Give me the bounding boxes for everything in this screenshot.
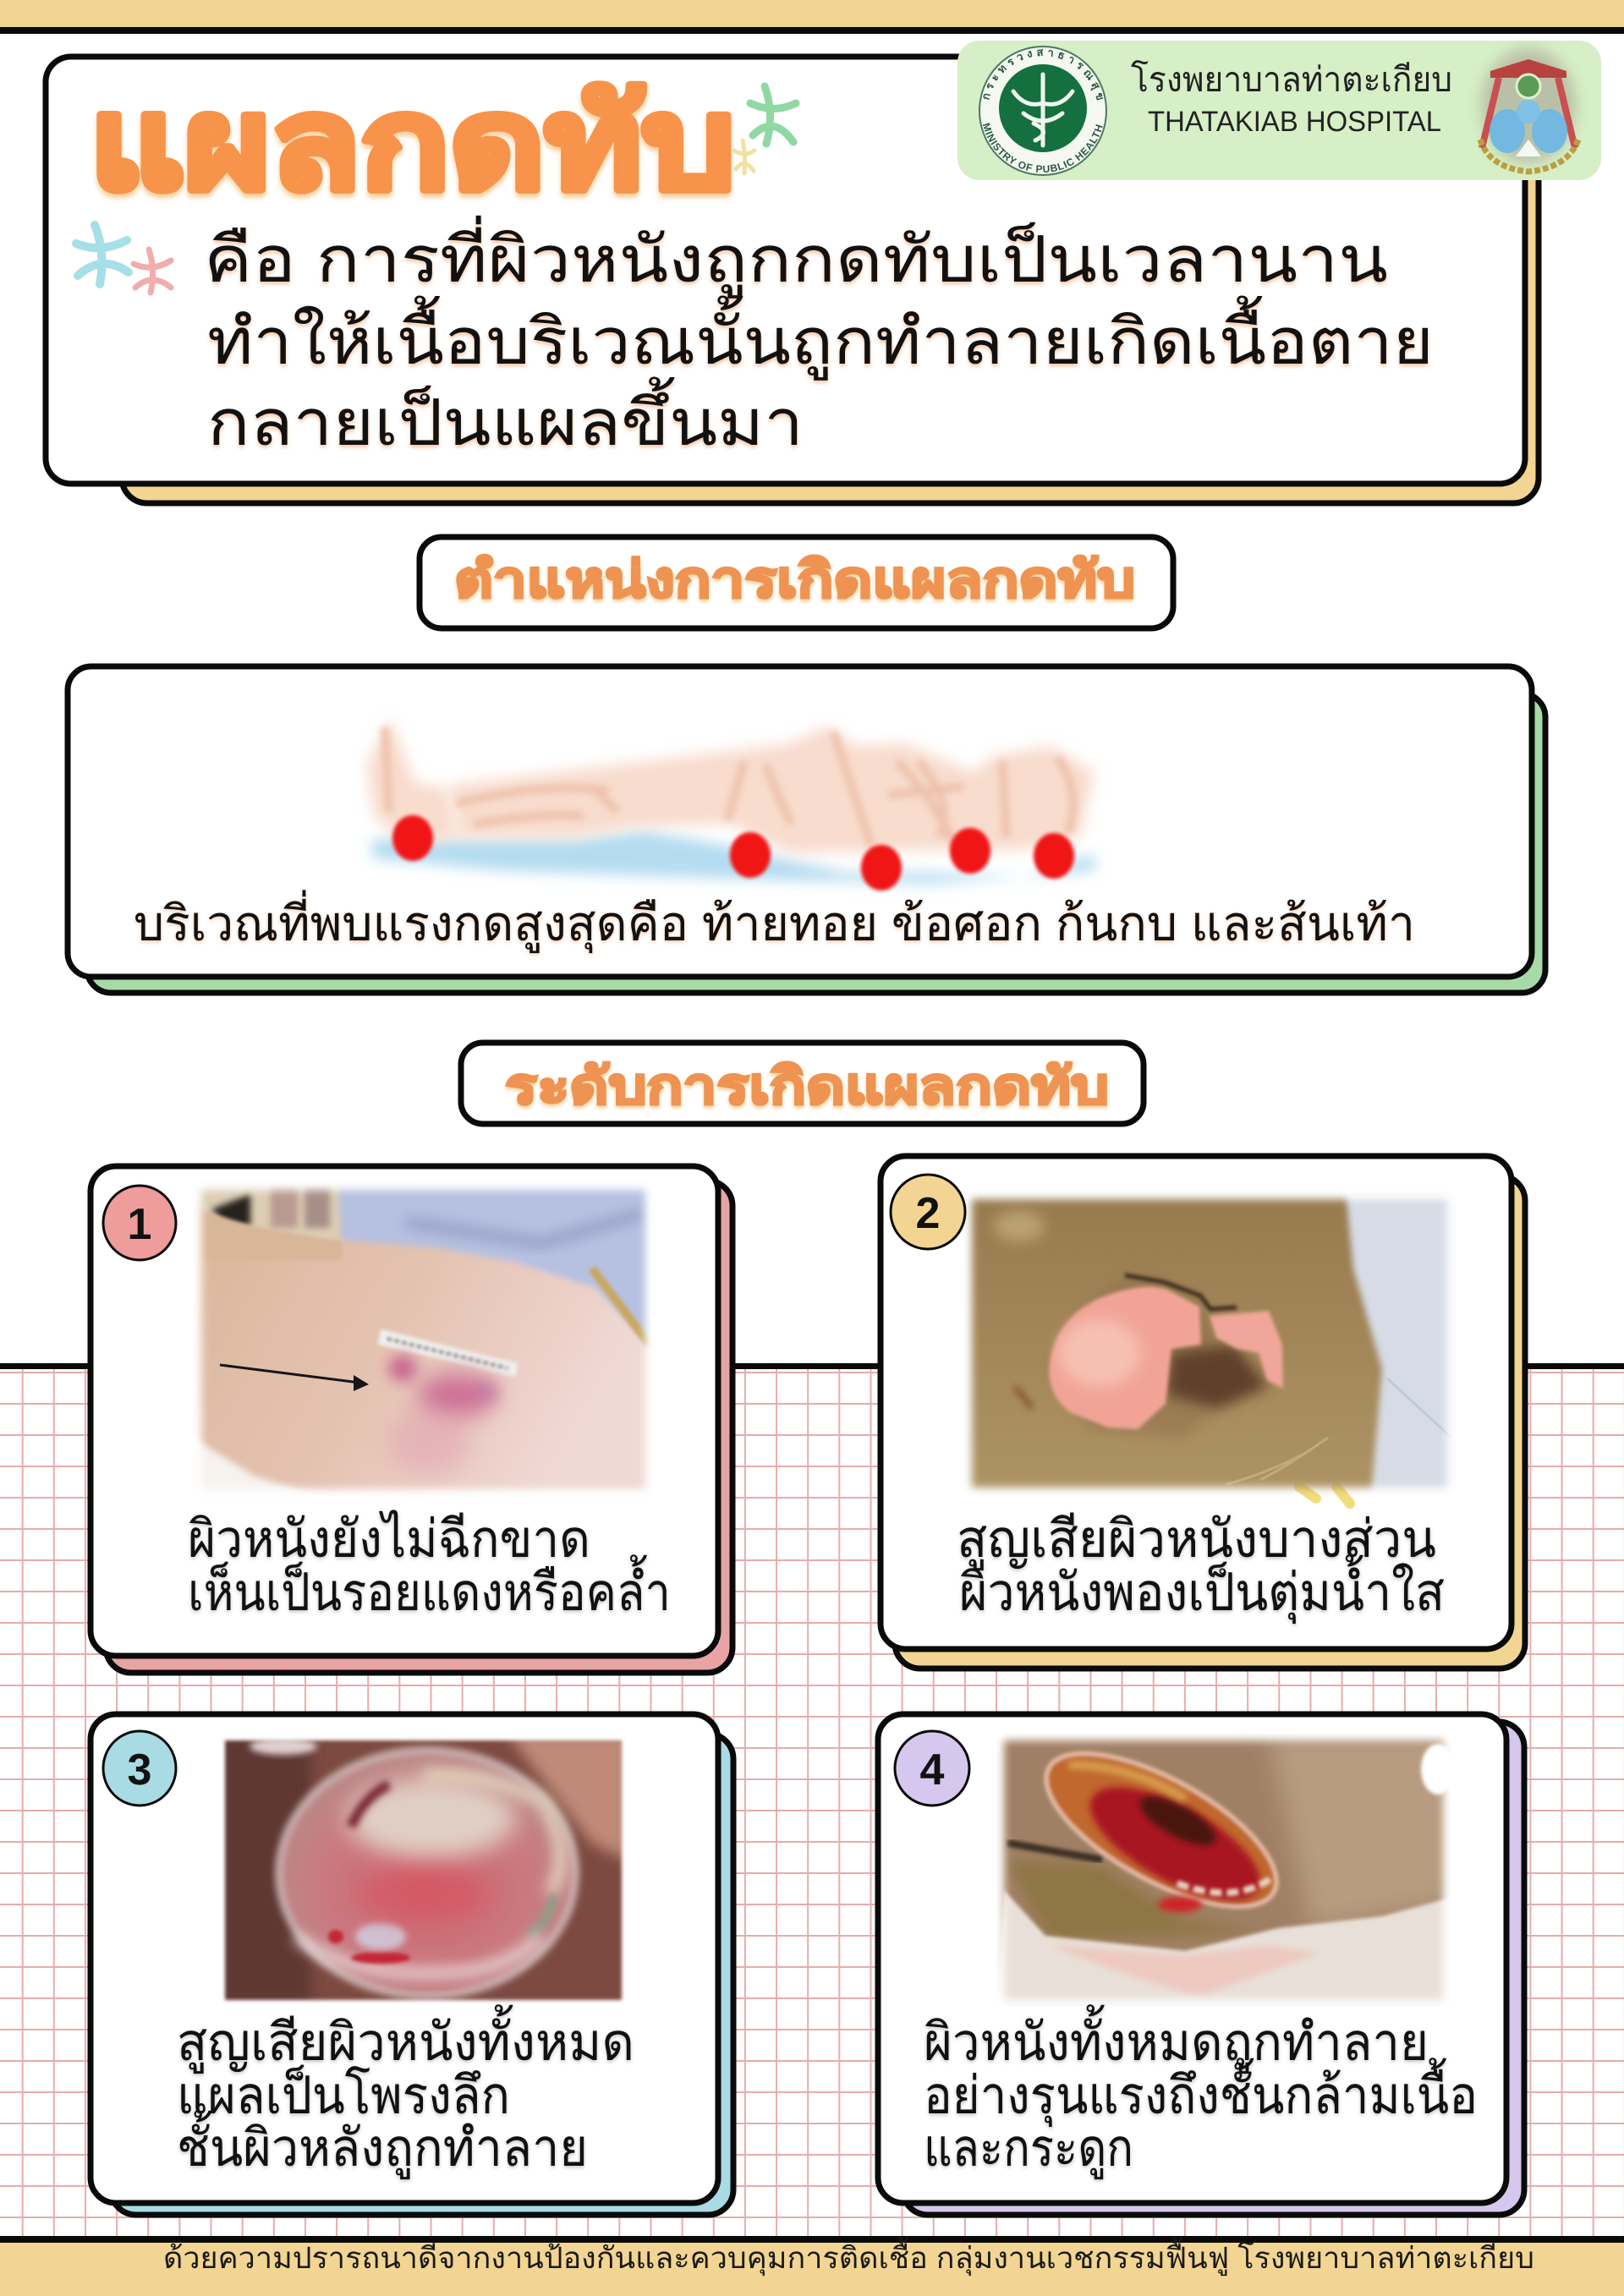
card bbox=[878, 1714, 1506, 2203]
card shadow bbox=[111, 1734, 733, 2215]
stage 3 caption bbox=[177, 2004, 634, 2180]
definition text: คือ การที่ผิวหนังถูกกดทับเป็นเวลานาน bbox=[204, 215, 1388, 299]
locations caption: บริเวณที่พบแรงกดสูงสุดคือ ท้ายทอย ข้อศอก ก้นกบ และส้นเท้า bbox=[134, 890, 1415, 954]
footer credit: ด้วยความปรารถนาดีจากงานป้องกันและควบคุมการติดเชื้อ กลุ่มงานเวชกรรมฟื้นฟู โรงพยาบาลท่าตะเกียบ bbox=[163, 2236, 1534, 2277]
panel card bbox=[46, 57, 1525, 484]
icon: ministry seal: กระทรวงสาธารณสุข bbox=[983, 49, 1103, 100]
stage 4 caption: อย่างรุนแรงถึงชั้นกล้ามเนื้อ bbox=[924, 2058, 1478, 2128]
heading: pressure sore stages: ระดับการเกิดแผลกดทับ bbox=[505, 1058, 1109, 1115]
panel shadow bbox=[122, 93, 1539, 503]
stage 4 caption: และกระดูก bbox=[924, 2119, 1133, 2180]
stage 1 caption: เห็นเป็นรอยแดงหรือคล้ำ bbox=[188, 1554, 671, 1622]
icon: hospital emblem bbox=[1480, 48, 1578, 172]
icon: sparkle behind photo bbox=[1299, 1487, 1350, 1504]
heading: pressure sore locations: ตำแหน่งการเกิดแผลกดทับ bbox=[454, 551, 1135, 608]
panel: stage 2 bbox=[881, 1156, 1525, 1669]
icon: yellow sparkle bbox=[734, 140, 754, 173]
strip background bbox=[957, 41, 1601, 180]
stage number bbox=[895, 1731, 969, 1806]
photo: deep wound bbox=[996, 1723, 1455, 2006]
icon: blue sparkle bbox=[76, 225, 129, 284]
stage number bbox=[103, 1731, 176, 1806]
panel: stage 4 bbox=[878, 1714, 1524, 2215]
definition text: กลายเป็นแผลขึ้นมา bbox=[207, 376, 804, 459]
stage 3 caption: แผลเป็นโพรงลึก bbox=[177, 2064, 510, 2125]
icon: green sparkle bbox=[750, 86, 796, 144]
hospital logo strip bbox=[957, 41, 1601, 180]
stage 1 caption bbox=[188, 1510, 671, 1622]
top band bbox=[0, 0, 1624, 34]
stage 1 caption: ผิวหนังยังไม่ฉีกขาด bbox=[188, 1510, 590, 1569]
heading: pressure sore locations bbox=[420, 537, 1173, 628]
panel card bbox=[68, 666, 1532, 977]
stage number: 3 bbox=[128, 1745, 151, 1795]
stage number: 4 bbox=[920, 1745, 945, 1795]
grid background bbox=[0, 1363, 1624, 2238]
panel shadow bbox=[87, 693, 1545, 993]
stage number: 1 bbox=[128, 1200, 151, 1249]
panel: pressure locations bbox=[68, 666, 1545, 993]
stage number bbox=[103, 1186, 176, 1260]
pressure points bbox=[392, 815, 1074, 890]
illustration: skeleton body lying down bbox=[366, 719, 1095, 890]
photo: redness on skin bbox=[193, 1181, 654, 1498]
stage number bbox=[891, 1175, 965, 1249]
stage 2 caption: ผิวหนังพองเป็นตุ่มน้ำใส bbox=[959, 1554, 1445, 1625]
stage 4 caption: ผิวหนังทั้งหมดถูกทำลาย bbox=[924, 2004, 1429, 2074]
card bbox=[91, 1714, 718, 2203]
card shadow bbox=[106, 1181, 732, 1673]
stage 2 caption: สูญเสียผิวหนังบางส่วน bbox=[957, 1510, 1436, 1571]
stage 2 caption bbox=[957, 1510, 1445, 1625]
stage 3 caption: ชั้นผิวหลังถูกทำลาย bbox=[177, 2110, 588, 2180]
card bbox=[881, 1156, 1512, 1649]
icon: ministry seal: MINISTRY OF PUBLIC HEALTH bbox=[983, 123, 1103, 173]
icon: ministry seal bbox=[979, 46, 1107, 176]
hospital name: โรงพยาบาลท่าตะเกียบ bbox=[1131, 60, 1452, 99]
card shadow bbox=[895, 1175, 1525, 1669]
photo: partial skin loss bbox=[963, 1191, 1456, 1496]
panel: stage 1 bbox=[91, 1166, 732, 1673]
title: แผลกดทับ bbox=[90, 73, 735, 215]
icon: pink sparkle bbox=[134, 249, 171, 293]
definition text bbox=[204, 215, 1434, 459]
photo: full thickness wound bbox=[218, 1734, 628, 2006]
stage 3 caption: สูญเสียผิวหนังทั้งหมด bbox=[177, 2004, 634, 2074]
stage number: 2 bbox=[916, 1189, 940, 1238]
hospital logo strip: THATAKIAB HOSPITAL bbox=[1148, 106, 1441, 138]
panel: stage 3 bbox=[91, 1714, 733, 2215]
definition text: ทำให้เนื้อบริเวณนั้นถูกทำลายเกิดเนื้อตาย bbox=[207, 295, 1434, 381]
stage 4 caption bbox=[924, 2004, 1478, 2180]
heading: pressure sore stages bbox=[461, 1043, 1144, 1124]
card shadow bbox=[903, 1722, 1524, 2215]
panel: definition bbox=[46, 57, 1539, 503]
footer band bbox=[0, 2236, 1624, 2296]
card bbox=[91, 1166, 718, 1656]
